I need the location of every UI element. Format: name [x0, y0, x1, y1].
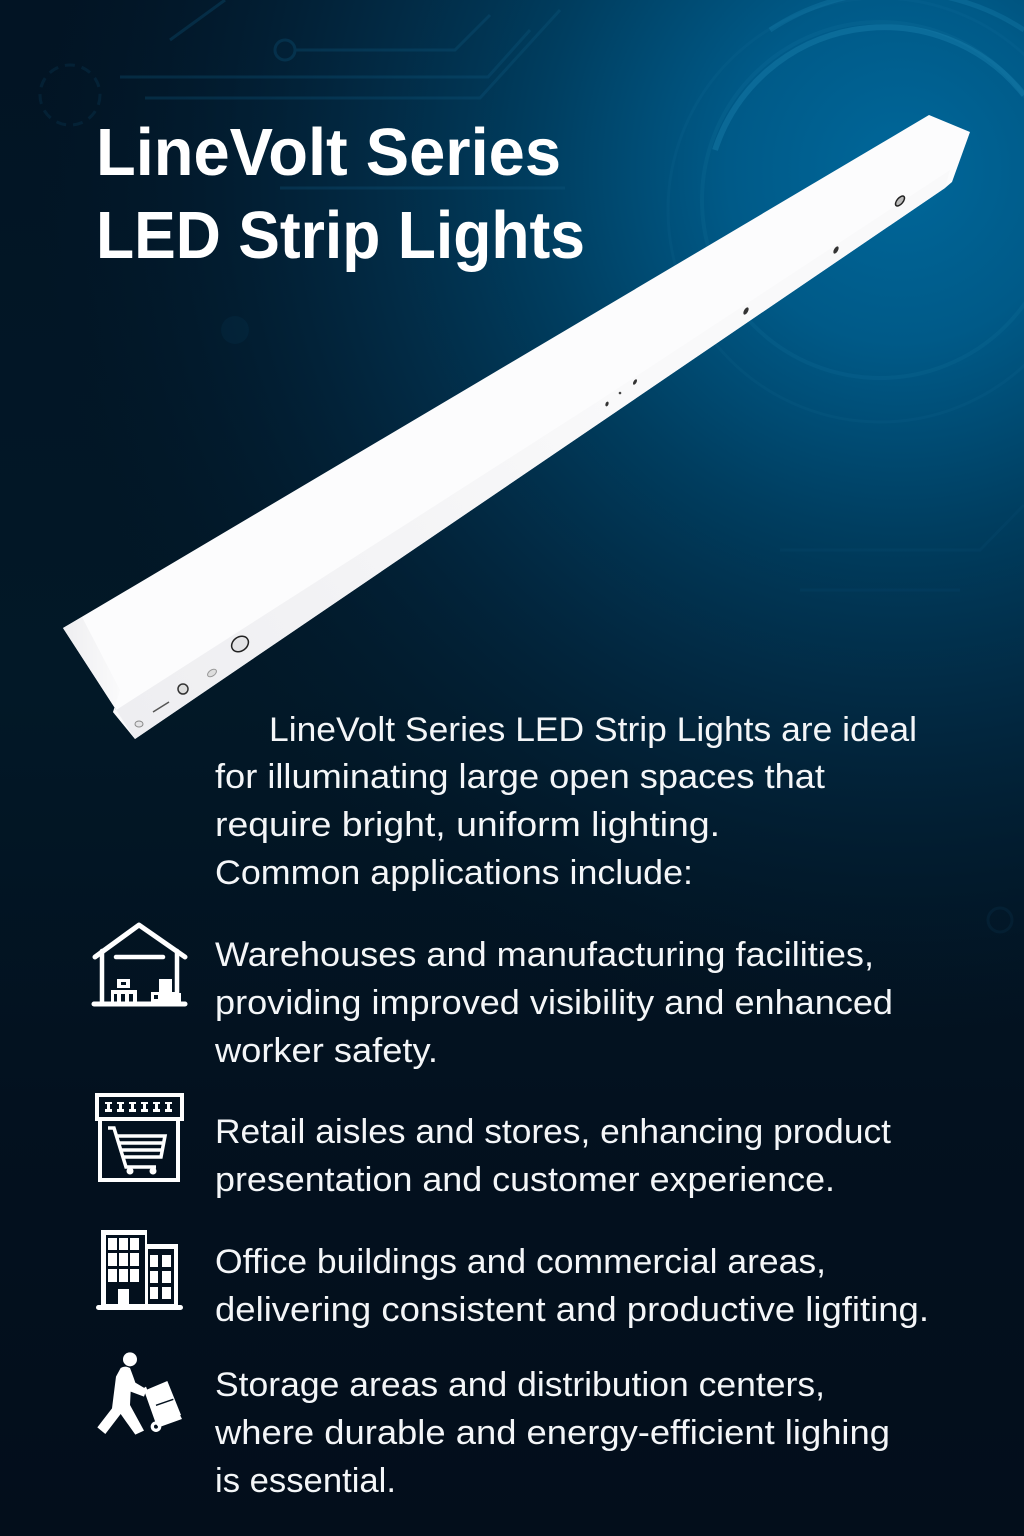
- icon: office buildings: [96, 1230, 183, 1310]
- intro text block: LineVolt Series LED Strip Lights are ideal: [269, 711, 917, 749]
- application text: warehouses: providing improved visibility and enhanced: [215, 984, 893, 1022]
- application text: retail: Retail aisles and stores, enhancing product: [215, 1113, 892, 1151]
- icon: worker with hand truck: [97, 1352, 182, 1435]
- application text: warehouses: worker safety.: [214, 1032, 438, 1070]
- application text: retail: presentation and customer experience.: [215, 1161, 835, 1199]
- application text: offices: delivering consistent and productive ligfiting.: [215, 1291, 929, 1329]
- application text: retail: [215, 1113, 892, 1199]
- title line 2: LED Strip Lights: [96, 198, 585, 273]
- application text: warehouses: [214, 936, 893, 1070]
- background tech pattern: rings and circuit traces: [40, 0, 1024, 932]
- title: [96, 115, 585, 273]
- intro text block: Common applications include:: [215, 854, 693, 892]
- intro text block: [215, 711, 917, 892]
- LED strip light product: [63, 115, 970, 739]
- application text: offices: Office buildings and commercial areas,: [215, 1243, 826, 1281]
- icon: retail store with cart: [97, 1095, 182, 1180]
- intro text block: require bright, uniform lighting.: [215, 806, 720, 844]
- application text: storage: where durable and energy-efficient lighing: [214, 1414, 890, 1452]
- application text: storage: [214, 1366, 890, 1500]
- icon: warehouse: [94, 925, 185, 1004]
- mounting holes: [135, 194, 906, 727]
- application text: warehouses: Warehouses and manufacturing facilities,: [215, 936, 874, 974]
- application text: storage: is essential.: [215, 1462, 396, 1500]
- application text: storage: Storage areas and distribution centers,: [215, 1366, 825, 1404]
- title line 1: LineVolt Series: [96, 115, 561, 190]
- intro text block: for illuminating large open spaces that: [215, 758, 826, 796]
- application text: offices: [215, 1243, 929, 1329]
